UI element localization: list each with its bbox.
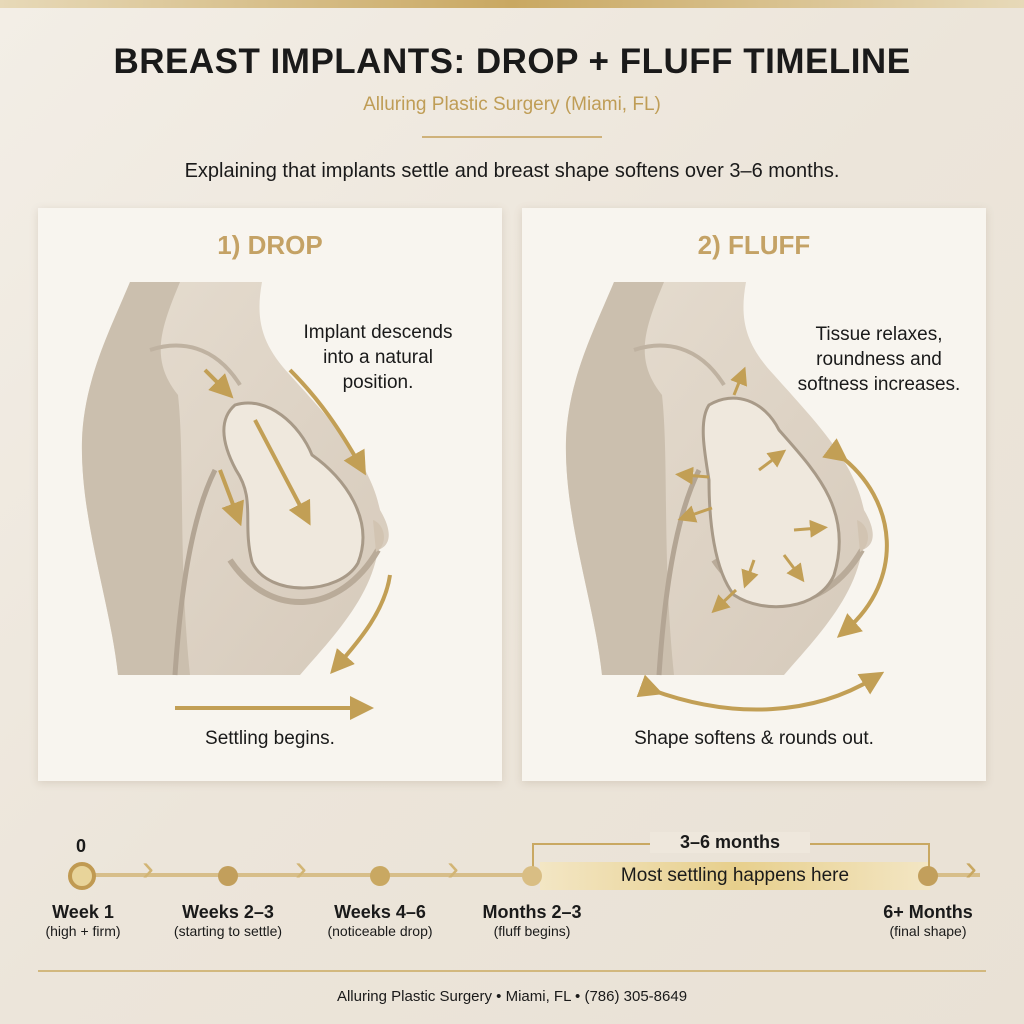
highlight band — [540, 862, 930, 890]
illustration: drop figure — [82, 282, 390, 708]
implant outline — [224, 403, 363, 588]
highlight band: Most settling happens here — [621, 865, 849, 886]
timeline: (starting to settle) — [174, 923, 282, 939]
heading: fluff: 2) FLUFF — [698, 230, 810, 260]
timeline: Weeks 4–6 — [334, 902, 426, 922]
bracket: 3-6 months — [532, 843, 930, 869]
timeline: 3–6 months — [680, 832, 780, 852]
illustration: fluff figure — [566, 282, 887, 710]
nodes — [68, 862, 96, 890]
labels — [45, 902, 121, 939]
implant outline — [703, 398, 839, 607]
timeline: › — [447, 847, 459, 888]
timeline: › — [142, 847, 154, 888]
drop arrows — [175, 370, 390, 708]
timeline: › — [295, 847, 307, 888]
timeline: Weeks 2–3 — [182, 902, 274, 922]
text: tissue relaxes: Tissue relaxes, roundness and softness increases. — [798, 324, 960, 395]
timeline: › — [965, 847, 977, 888]
panel: fluff — [522, 208, 986, 781]
timeline — [45, 832, 980, 939]
text: shape softens: Shape softens & rounds out. — [634, 728, 874, 749]
timeline: 0 — [76, 836, 86, 856]
heading: drop: 1) DROP — [217, 230, 323, 260]
panel: drop — [38, 208, 502, 781]
text: implant descends: Implant descends into a natural position. — [304, 322, 452, 393]
timeline: (noticeable drop) — [327, 923, 433, 939]
footer: Alluring Plastic Surgery • Miami, FL • (786) 305-8649 — [337, 988, 687, 1005]
timeline: Months 2–3 — [482, 902, 582, 922]
title: BREAST IMPLANTS: DROP + FLUFF TIMELINE — [113, 42, 911, 81]
labels: (high + firm) — [45, 923, 121, 939]
text: settling begins: Settling begins. — [205, 728, 335, 749]
intro text: Explaining that implants settle and breast shape softens over 3–6 months. — [185, 160, 839, 182]
timeline: (fluff begins) — [494, 923, 570, 939]
labels: Week 1 — [52, 902, 114, 922]
subtitle: Alluring Plastic Surgery (Miami, FL) — [363, 94, 661, 115]
timeline: 6+ Months — [883, 902, 973, 922]
expansion arrows — [684, 375, 819, 607]
timeline: (final shape) — [889, 923, 967, 939]
